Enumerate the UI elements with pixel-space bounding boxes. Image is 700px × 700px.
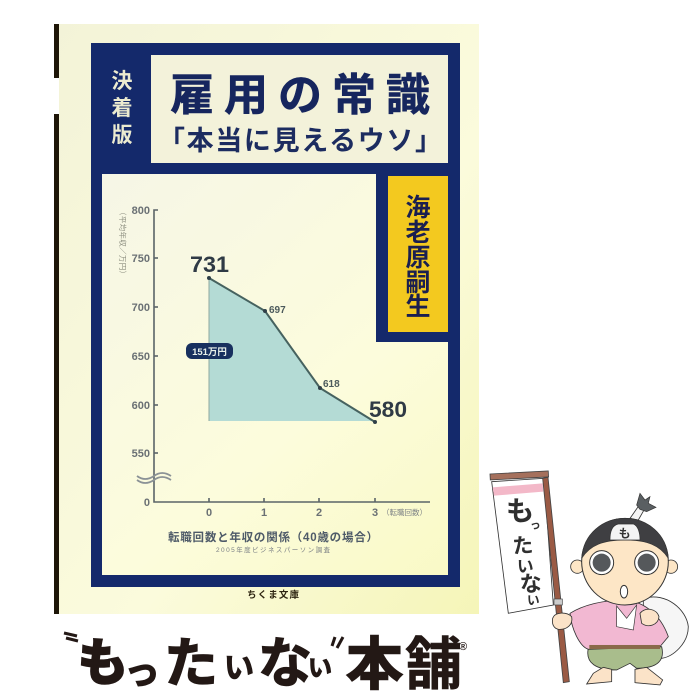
data label 580: 580 <box>369 397 407 422</box>
data label 731: 731 <box>190 252 229 277</box>
logo: もったいない本舗 <box>64 633 467 697</box>
chart source: 2005年度ビジネスパーソン調査 <box>216 545 330 554</box>
panel: book cover <box>54 24 479 614</box>
text: edition label: 決 <box>112 70 132 93</box>
data label 618: 618 <box>323 379 340 390</box>
logo: もったいない本舗: ® <box>459 641 467 653</box>
x axis labels: 2 <box>316 507 322 519</box>
callout: 151万円: 151万円 <box>192 347 227 358</box>
text: edition label <box>112 70 132 147</box>
logo: もったいない本舗: も <box>78 635 128 691</box>
panel: navy frame <box>91 43 460 587</box>
bundle on back <box>643 597 688 658</box>
logo: もったいない本舗: い <box>308 655 332 682</box>
icon: banner <box>490 471 569 683</box>
y axis labels <box>132 205 150 509</box>
legs <box>588 647 662 670</box>
text: banner text: い <box>527 594 540 608</box>
text: author name <box>405 194 431 321</box>
x axis labels: 0 <box>206 507 212 519</box>
chart caption: 転職回数と年収の関係（40歳の場合） <box>168 530 378 544</box>
text: edition label: 着 <box>112 97 132 120</box>
y axis title: （平均年収／万円） <box>118 208 128 278</box>
text: banner text <box>505 495 543 608</box>
logo: もったいない本舗: 本 <box>346 633 403 697</box>
text: author name: 老 <box>405 219 431 247</box>
chart: job changes vs annual income <box>118 205 430 554</box>
chart line <box>209 278 375 422</box>
panel: title box <box>151 55 448 163</box>
x axis labels: 1 <box>261 507 267 519</box>
logo quote mark <box>332 637 343 648</box>
head <box>582 518 668 605</box>
y axis labels: 550 <box>132 448 150 460</box>
hair <box>582 518 668 558</box>
x axis title: （転職回数） <box>382 507 427 517</box>
callout: 151万円 <box>186 343 233 359</box>
hands <box>552 613 572 629</box>
heading: subtitle: 「本当に見えるウソ」 <box>158 126 442 156</box>
headband <box>610 524 640 540</box>
x axis labels <box>206 507 378 519</box>
x axis labels: 3 <box>372 507 378 519</box>
data label 697: 697 <box>269 305 286 316</box>
y axis labels: 700 <box>132 302 150 314</box>
ears <box>571 560 584 573</box>
chart area fill <box>209 278 375 421</box>
axis break mark <box>137 473 171 483</box>
y axis labels: 650 <box>132 351 150 363</box>
headband: も <box>619 526 631 540</box>
logo: もったいない本舗: い <box>224 652 254 685</box>
logo: もったいない本舗: た <box>164 634 218 694</box>
text: banner text: も <box>505 495 535 528</box>
text: author name: 原 <box>405 244 431 272</box>
eyes <box>590 551 614 575</box>
y axis labels: 800 <box>132 205 150 217</box>
text: banner text: な <box>519 571 543 597</box>
y axis labels: 600 <box>132 400 150 412</box>
text: author name: 嗣 <box>405 269 431 297</box>
icon: mascot with banner <box>490 471 688 685</box>
text: edition label: 版 <box>112 124 132 147</box>
text: author name: 生 <box>405 293 431 321</box>
text: publisher: ちくま文庫 <box>247 589 299 601</box>
mouth <box>620 585 628 598</box>
logo quote mark <box>64 633 78 641</box>
logo: もったいない本舗: っ <box>124 651 160 692</box>
panel: author box <box>388 176 448 332</box>
text: author name: 海 <box>405 194 431 222</box>
robe <box>570 600 668 649</box>
logo: もったいない本舗: 舗 <box>405 633 462 697</box>
y axis labels: 750 <box>132 253 150 265</box>
axes <box>154 210 430 502</box>
text: banner text: い <box>517 557 534 576</box>
logo: もったいない本舗: な <box>258 634 312 694</box>
topknot <box>630 505 645 520</box>
y axis labels: 0 <box>144 497 150 509</box>
text: banner text: っ <box>530 520 541 532</box>
text: banner text: た <box>512 534 534 558</box>
heading: title: 雇用の常識 <box>170 71 430 120</box>
